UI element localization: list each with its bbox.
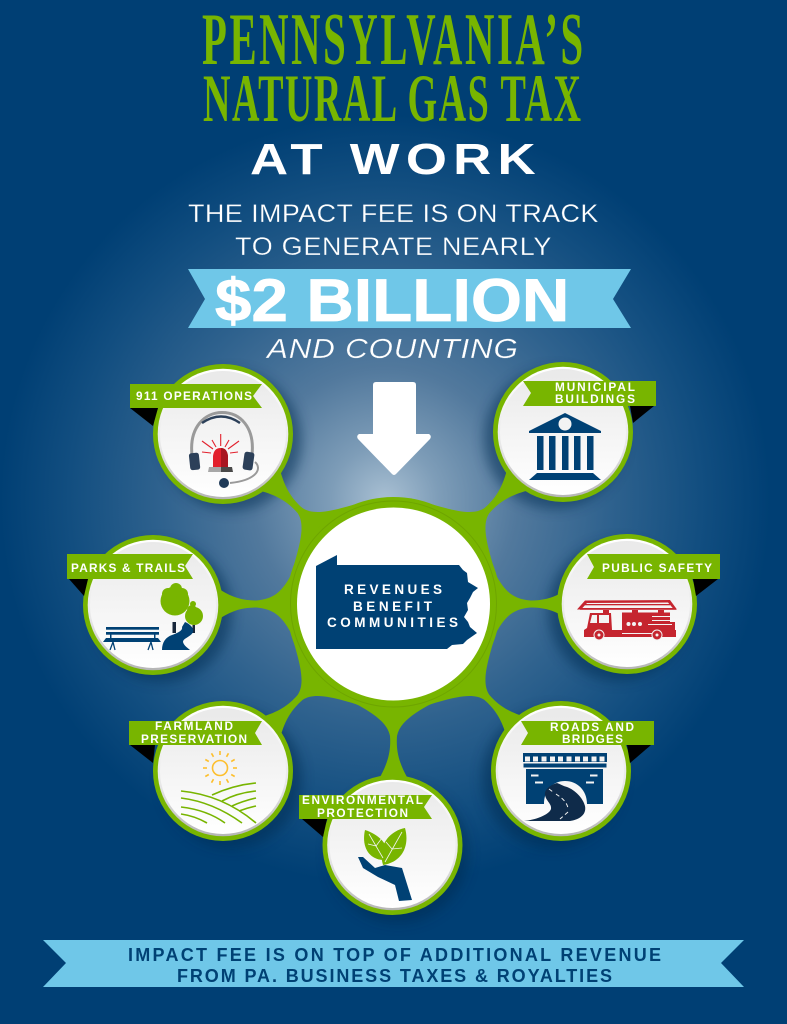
title line: At Work: AT WORK xyxy=(250,135,536,184)
ribbon tail xyxy=(130,745,155,763)
ribbon tail xyxy=(627,745,651,763)
title xyxy=(202,0,583,184)
icon: hand holding leaves xyxy=(358,828,412,901)
ribbon label xyxy=(130,384,262,408)
ribbon tail xyxy=(693,579,718,596)
ribbon tail xyxy=(302,819,327,837)
title line: Pennsylvania's: PENNSYLVANIA’S xyxy=(202,0,583,80)
panel: parks and trails: PARKS & TRAILS xyxy=(71,561,185,575)
panel: farmland preservation: PRESERVATION xyxy=(141,732,247,746)
ribbon label xyxy=(587,554,720,579)
connectors between hub and circles xyxy=(220,439,566,778)
ribbon label xyxy=(299,795,432,819)
icon: bridge and road xyxy=(523,753,607,821)
panel: roads and bridges: BRIDGES xyxy=(562,732,623,746)
panel: parks and trails xyxy=(67,535,223,675)
panel: environmental protection: ENVIRONMENTAL xyxy=(302,793,423,807)
intro text: THE IMPACT FEE IS ON TRACK xyxy=(188,199,599,228)
panel: 911 operations xyxy=(130,364,293,504)
ribbon tail xyxy=(130,408,158,426)
arrow xyxy=(357,382,431,475)
panel: municipal buildings xyxy=(493,362,656,502)
icon: bench, trees and path xyxy=(103,583,203,650)
hub: revenues benefit communities xyxy=(286,497,500,711)
panel: 911 operations: 911 OPERATIONS xyxy=(136,389,252,403)
hub label: BENEFIT xyxy=(353,599,433,614)
icon: columned building xyxy=(529,413,601,480)
panel: municipal buildings: MUNICIPAL xyxy=(555,380,635,394)
panel: farmland preservation xyxy=(129,701,293,841)
ribbon label xyxy=(129,721,262,745)
ribbon tail xyxy=(630,406,654,423)
subheading: and counting: AND COUNTING xyxy=(265,334,518,365)
hub label: REVENUES xyxy=(344,582,442,597)
panel: environmental protection: PROTECTION xyxy=(317,806,408,820)
bottom banner: IMPACT FEE IS ON TOP OF ADDITIONAL REVENUE xyxy=(128,945,661,965)
bottom banner xyxy=(43,940,744,987)
icon: Pennsylvania map xyxy=(316,555,478,649)
panel: public safety: PUBLIC SAFETY xyxy=(602,561,712,575)
panel: roads and bridges: ROADS AND xyxy=(550,720,634,734)
ribbon label xyxy=(523,381,656,406)
panel: environmental protection xyxy=(299,775,462,915)
bottom banner: FROM PA. BUSINESS TAXES & ROYALTIES xyxy=(177,966,612,986)
ribbon label xyxy=(521,721,654,745)
ribbon tail xyxy=(69,579,88,596)
ribbon label xyxy=(67,554,193,579)
intro text: TO GENERATE NEARLY xyxy=(235,232,551,261)
icon: fire truck xyxy=(577,600,677,640)
title line: Natural Gas Tax: NATURAL GAS TAX xyxy=(203,61,581,136)
panel: municipal buildings: BUILDINGS xyxy=(555,392,635,406)
icon: sun over fields xyxy=(181,751,256,823)
satellite shadows xyxy=(92,369,688,923)
panel: public safety xyxy=(557,534,720,674)
banner: $2 billion: $2 BILLION xyxy=(215,267,569,334)
panel: roads and bridges xyxy=(491,701,654,841)
icon: headset and siren xyxy=(189,412,258,488)
panel: farmland preservation: FARMLAND xyxy=(155,719,233,733)
hub label: COMMUNITIES xyxy=(327,615,458,630)
hub label xyxy=(327,582,458,630)
intro text xyxy=(188,199,599,261)
